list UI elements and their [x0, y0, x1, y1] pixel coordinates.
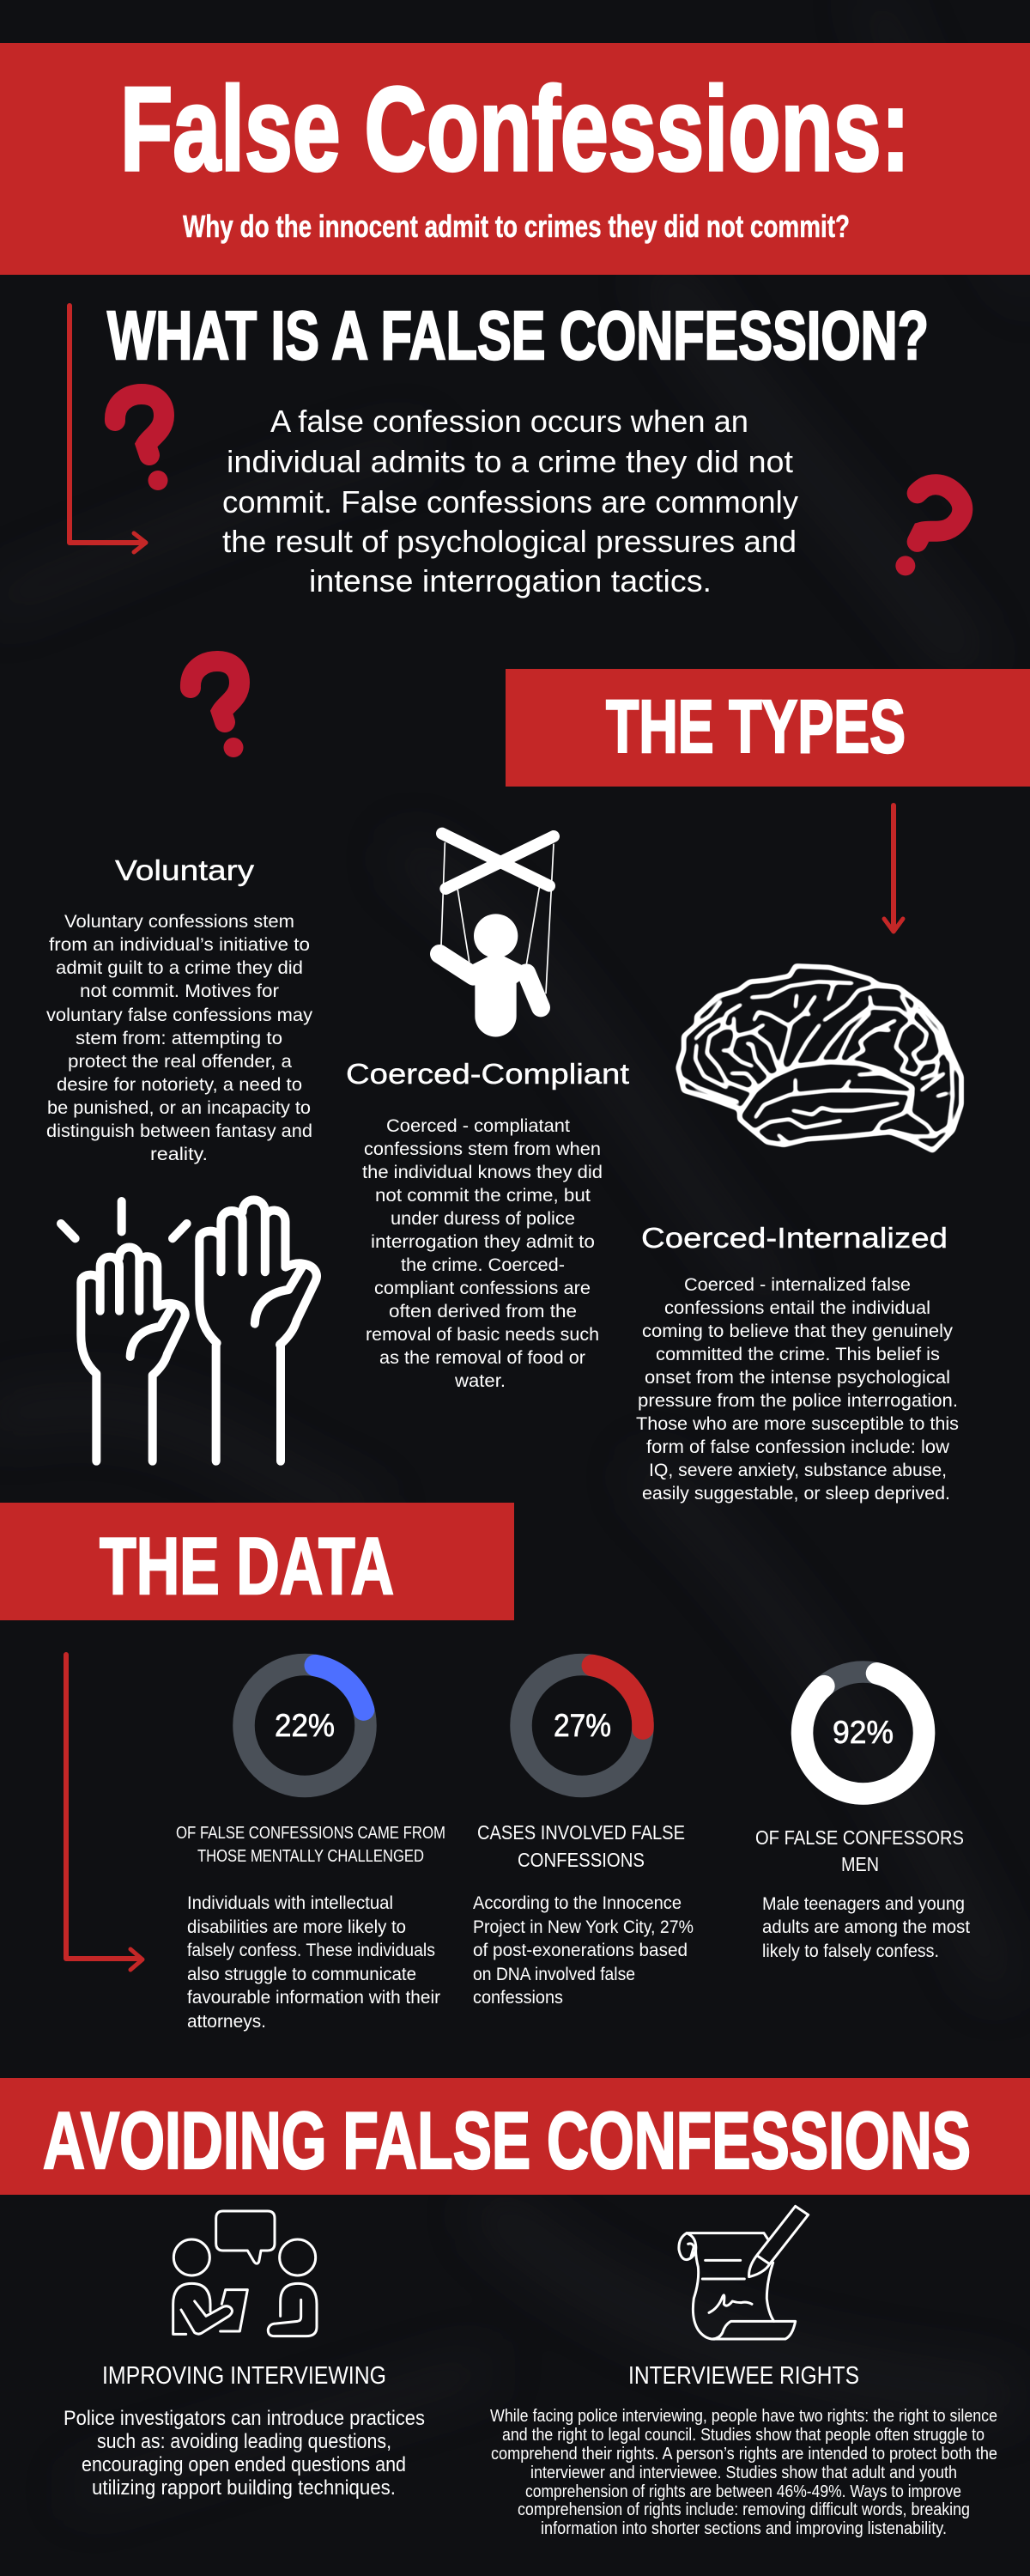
donut chart: 27%	[521, 1664, 643, 1786]
text block: interviewee rights	[490, 2407, 997, 2538]
panel: stat 92%: 92%	[833, 1715, 894, 1750]
text block: coerced-compliant: not commit the crime, but	[375, 1186, 591, 1206]
caption: 22%: THOSE MENTALLY CHALLENGED	[197, 1847, 424, 1866]
text block: definition: commit. False confessions are commonly	[222, 484, 798, 519]
text block: definition	[222, 404, 798, 598]
text block: coerced-internalized: form of false confession include: low	[646, 1437, 950, 1457]
icon: question mark types	[191, 661, 244, 757]
text block: coerced-compliant: often derived from the	[389, 1302, 577, 1321]
text block: definition: A false confession occurs when an	[270, 404, 748, 439]
text block: voluntary: protect the real offender, a	[68, 1052, 292, 1072]
caption: 92%: MEN	[841, 1853, 879, 1875]
heading banner: the data: THE DATA	[100, 1521, 394, 1611]
text block: coerced-compliant: confessions stem from when	[364, 1139, 601, 1159]
text block: coerced-compliant: compliant confessions are	[374, 1279, 591, 1298]
text block: 92%: likely to falsely confess.	[762, 1941, 939, 1961]
text block: 22%: Individuals with intellectual	[187, 1893, 393, 1913]
text block: 22%: disabilities are more likely to	[187, 1917, 406, 1937]
text block: interviewee rights: comprehension of rights are between 46%-49%. Ways to improve	[525, 2482, 961, 2501]
panel: stat 22%: 22%	[275, 1708, 335, 1743]
text block: coerced-compliant: as the removal of food or	[379, 1348, 585, 1368]
heading banner: the types: THE TYPES	[606, 685, 906, 769]
caption: 27%: CONFESSIONS	[518, 1849, 645, 1871]
text block: coerced-compliant	[362, 1116, 603, 1391]
heading: coerced-compliant: Coerced-Compliant	[346, 1058, 629, 1090]
text block: voluntary: distinguish between fantasy and	[46, 1121, 312, 1141]
text block: coerced-internalized: confessions entail the individual	[664, 1298, 930, 1318]
arrow: types down	[884, 805, 903, 932]
text block: coerced-compliant: water.	[454, 1371, 506, 1391]
caption: 22%	[176, 1824, 445, 1866]
subtitle: Why do the innocent admit to crimes they did not commit?	[183, 209, 850, 244]
heading: improving interviewing: IMPROVING INTERVIEWING	[102, 2362, 386, 2390]
caption: 27%	[477, 1821, 685, 1871]
caption: 92%: OF FALSE CONFESSORS	[755, 1826, 964, 1849]
text block: coerced-internalized: IQ, severe anxiety, substance abuse,	[649, 1461, 947, 1480]
text block: 27%: of post-exonerations based	[473, 1941, 688, 1960]
icon: puppet	[439, 834, 554, 1036]
panel: coerced-compliant	[346, 834, 629, 1391]
text block: voluntary: reality.	[150, 1145, 208, 1164]
text block: interviewee rights: information into shorter sections and improving listenability.	[541, 2519, 947, 2538]
text block: voluntary: from an individual’s initiative to	[49, 935, 310, 955]
panel: stat 27%: 27%	[554, 1708, 611, 1743]
heading: voluntary: Voluntary	[115, 854, 255, 886]
donut chart: 92%	[802, 1672, 924, 1794]
text block: 27%	[473, 1893, 694, 2008]
arrow: intro elbow	[70, 306, 146, 552]
icon: signed scroll	[679, 2206, 809, 2339]
heading: coerced-internalized: Coerced-Internalized	[641, 1222, 948, 1254]
text block: improving interviewing: encouraging open ended questions and	[82, 2453, 406, 2476]
text block: 22%: attorneys.	[187, 2012, 266, 2032]
text block: 22%: also struggle to communicate	[187, 1965, 416, 1984]
text block: coerced-internalized: Those who are more susceptible to this	[636, 1414, 959, 1434]
text block: 27%: confessions	[473, 1988, 563, 2008]
text block: 22%: falsely confess. These individuals	[187, 1941, 435, 1960]
text block: improving interviewing: utilizing rapport building techniques.	[92, 2476, 396, 2500]
text block: definition: individual admits to a crime they did not	[227, 444, 793, 479]
text block: voluntary: voluntary false confessions may	[46, 1005, 313, 1025]
text block: interviewee rights: interviewer and interviewee. Studies show that adult and youth	[530, 2464, 957, 2482]
panel: stat 27%	[473, 1664, 694, 2008]
text block: 92%: Male teenagers and young	[762, 1894, 965, 1914]
text block: voluntary	[46, 912, 313, 1164]
text block: 27%: Project in New York City, 27%	[473, 1917, 694, 1937]
caption: 22%: OF FALSE CONFESSIONS CAME FROM	[176, 1824, 445, 1843]
text block: coerced-internalized: coming to believe that they genuinely	[642, 1321, 954, 1341]
text block: voluntary: desire for notoriety, a need to	[57, 1075, 302, 1095]
icon: question mark left	[115, 394, 168, 490]
text block: coerced-internalized: easily suggestable, or sleep deprived.	[642, 1484, 950, 1504]
text block: coerced-internalized: committed the crime. This belief is	[656, 1345, 940, 1364]
text block: voluntary: stem from: attempting to	[76, 1029, 282, 1048]
text block: interviewee rights: and the right to legal council. Studies show that people often struggle to	[502, 2426, 985, 2445]
text block: coerced-internalized: pressure from the police interrogation.	[638, 1391, 958, 1411]
title banner	[0, 43, 1030, 275]
text block: 22%: favourable information with their	[187, 1988, 440, 2008]
text block: improving interviewing: Police investigators can introduce practices	[64, 2407, 425, 2430]
text block: coerced-compliant: Coerced - compliatant	[386, 1116, 570, 1136]
panel: interviewee rights	[490, 2206, 997, 2538]
text block: interviewee rights: comprehension of rights include: removing difficult words, breaking	[518, 2500, 970, 2519]
text block: coerced-compliant: under duress of police	[391, 1209, 575, 1229]
text block: improving interviewing: such as: avoiding leading questions,	[97, 2430, 391, 2453]
icon: interview	[173, 2211, 317, 2336]
panel: coerced-internalized	[636, 966, 961, 1504]
text block: 92%: adults are among the most	[762, 1917, 970, 1937]
text block: 22%	[187, 1893, 440, 2032]
caption: 92%	[755, 1826, 964, 1875]
caption: 27%: CASES INVOLVED FALSE	[477, 1821, 685, 1844]
text block: coerced-compliant: the crime. Coerced-	[401, 1255, 565, 1275]
text block: voluntary: Voluntary confessions stem	[64, 912, 294, 932]
heading banner: the data	[0, 1503, 514, 1620]
text block: improving interviewing	[64, 2407, 425, 2500]
text block: coerced-internalized: Coerced - internalized false	[684, 1275, 911, 1295]
text block: 27%: on DNA involved false	[473, 1965, 635, 1984]
panel: stat 22%	[176, 1664, 445, 2032]
text block: voluntary: admit guilt to a crime they did	[56, 958, 303, 978]
donut chart: 22%	[244, 1664, 366, 1786]
icon: question mark right	[868, 474, 973, 580]
heading banner: the types	[506, 669, 1030, 787]
text block: coerced-compliant: removal of basic needs such	[366, 1325, 599, 1345]
text block: definition: the result of psychological pressures and	[222, 524, 797, 559]
text block: 27%: According to the Innocence	[473, 1893, 682, 1913]
panel: improving interviewing	[64, 2211, 425, 2500]
text block: voluntary: not commit. Motives for	[80, 981, 279, 1001]
icon: brain	[678, 966, 961, 1151]
panel: voluntary	[46, 854, 317, 1461]
text block: voluntary: be punished, or an incapacity to	[47, 1098, 311, 1118]
panel: stat 92%	[755, 1672, 970, 1961]
text block: 92%	[762, 1894, 970, 1961]
arrow: data elbow	[66, 1655, 142, 1970]
text block: coerced-internalized: onset from the intense psychological	[645, 1368, 950, 1388]
text block: coerced-compliant: the individual knows they did	[362, 1163, 603, 1182]
text block: coerced-compliant: interrogation they admit to	[371, 1232, 595, 1252]
icon: raised hands	[61, 1200, 317, 1461]
heading: interviewee rights: INTERVIEWEE RIGHTS	[628, 2362, 859, 2390]
text block: coerced-internalized	[636, 1275, 959, 1504]
text block: definition: intense interrogation tactics.	[309, 563, 712, 598]
